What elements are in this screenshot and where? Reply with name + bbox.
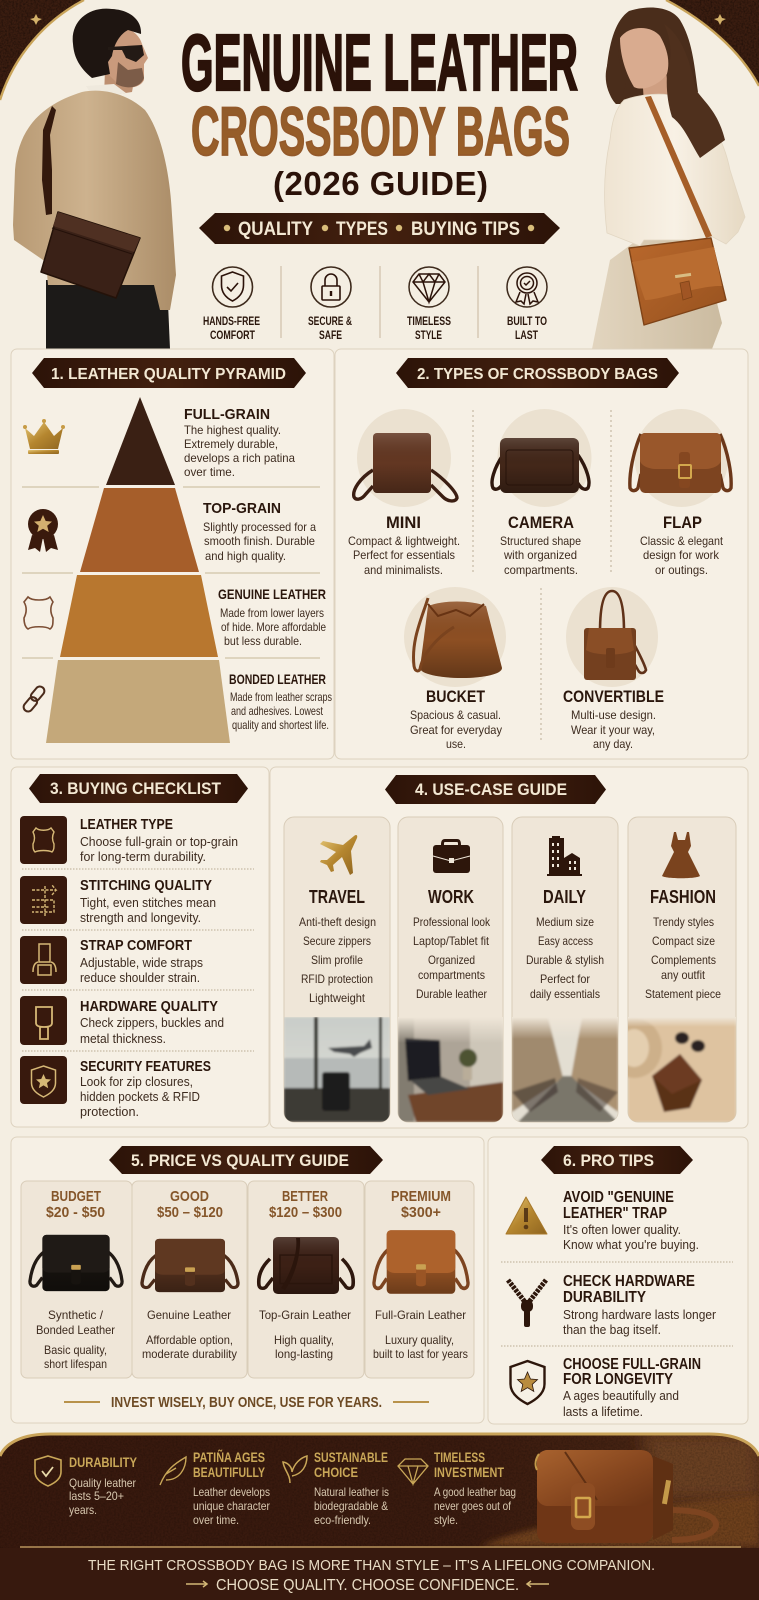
heading: section 5: 5. PRICE VS QUALITY GUIDE: [131, 1151, 349, 1170]
panel: price vs quality guide: [11, 1137, 484, 1423]
use case: daily: daily essentials: [530, 987, 600, 1001]
bag type: convertible: CONVERTIBLE: [563, 687, 664, 706]
check item: hardware: Check zippers, buckles and: [80, 1015, 224, 1030]
use case: travel: Secure zippers: [303, 934, 371, 948]
photo: laptop desk: [398, 1017, 503, 1122]
bag type: convertible: [563, 587, 664, 751]
tip: hardware: Strong hardware lasts longer: [563, 1307, 717, 1322]
tier text: full-grain: The highest quality.: [184, 423, 281, 437]
bag type: flap: design for work: [643, 548, 720, 562]
panel: pro tips: [488, 1137, 748, 1424]
tier text: top-grain: [203, 500, 316, 563]
benefit: sustainable: SUSTAINABLE: [314, 1449, 388, 1465]
benefit: timeless: [398, 1449, 516, 1527]
check item: leather type: Choose full-grain or top-grain: [80, 834, 238, 849]
benefit: patina: Leather develops: [193, 1485, 270, 1499]
bag type: mini: and minimalists.: [364, 563, 443, 577]
figure: woman with tan bag: [592, 8, 745, 349]
price tier: premium: Luxury quality,: [385, 1333, 454, 1347]
price tier: better: long-lasting: [275, 1347, 333, 1361]
heading: section 4: [385, 775, 606, 804]
price tier: premium: PREMIUM: [391, 1188, 451, 1205]
tier text: bonded leather: and adhesives. Lowest: [231, 704, 323, 718]
bag type: bucket: use.: [446, 737, 466, 751]
check item: hardware: metal thickness.: [80, 1031, 166, 1046]
tier text: full-grain: over time.: [184, 465, 235, 479]
price tier: budget: Bonded Leather: [36, 1323, 115, 1337]
panel: types of crossbody bags: [335, 349, 748, 759]
icon labels: COMFORT: [210, 328, 255, 342]
bag type: bucket: BUCKET: [426, 687, 486, 706]
tip: hardware: than the bag itself.: [563, 1322, 661, 1337]
benefit: durability: years.: [69, 1503, 97, 1517]
check item: security: hidden pockets & RFID: [80, 1089, 200, 1104]
icon: dress: [662, 832, 700, 878]
icon labels: SAFE: [319, 328, 342, 342]
price tier: budget: [21, 1181, 132, 1378]
use case: daily: Medium size: [536, 915, 594, 929]
use case: daily: [512, 817, 618, 1122]
bag type: camera: CAMERA: [508, 513, 574, 532]
benefit: sustainable: CHOICE: [314, 1464, 358, 1480]
heading: section 4: 4. USE-CASE GUIDE: [415, 781, 567, 799]
heading: section 5: [109, 1146, 383, 1174]
tip: choose full-grain: [510, 1356, 701, 1419]
heading: section 3: [29, 774, 248, 803]
use case: travel: Lightweight: [309, 991, 366, 1005]
use case: work: Professional look: [413, 915, 491, 929]
benefit: patina: unique character: [193, 1499, 270, 1513]
bag type: convertible: Wear it your way,: [571, 723, 655, 737]
tier text: bonded leather: [229, 671, 332, 732]
heading: section 1: [32, 358, 306, 388]
tip: hardware: DURABILITY: [563, 1289, 647, 1306]
tier text: full-grain: [184, 406, 295, 479]
pyramid tier: full-grain: [106, 397, 175, 485]
benefit: patina: [160, 1448, 270, 1527]
check item: security: SECURITY FEATURES: [80, 1059, 211, 1075]
check item: hardware: [20, 996, 224, 1046]
tip: hardware: [508, 1273, 717, 1337]
icon labels: LAST: [515, 328, 538, 342]
icon: secure padlock: [311, 267, 351, 307]
benefit: durability: DURABILITY: [69, 1454, 138, 1470]
heading: section 6: [541, 1146, 693, 1174]
heading: section 2: [396, 358, 679, 388]
use case: daily: Easy access: [538, 934, 593, 948]
check item: leather type: [20, 816, 238, 864]
use case: fashion: Complements: [651, 953, 716, 967]
footer band: [0, 1433, 759, 1600]
panel: leather quality pyramid: [11, 349, 334, 759]
use case: fashion: Statement piece: [645, 987, 721, 1001]
bag type: camera: compartments.: [504, 563, 578, 577]
tier text: top-grain: Slightly processed for a: [203, 520, 316, 534]
icon: leather hide: [24, 597, 53, 629]
price tier: better: Top-Grain Leather: [259, 1308, 351, 1322]
benefit: sustainable: biodegradable &: [314, 1499, 388, 1513]
bag type: camera: with organized: [503, 548, 577, 562]
bag type: camera: Structured shape: [500, 534, 581, 548]
benefit: durability: Quality leather: [69, 1476, 136, 1490]
tier text: genuine leather: of hide. More affordable: [221, 620, 326, 634]
price tier: budget: short lifespan: [44, 1357, 107, 1371]
use case: work: Laptop/Tablet fit: [413, 934, 490, 948]
tier text: bonded leather: quality and shortest life.: [232, 718, 329, 732]
icon labels: HANDS-FREE: [203, 314, 260, 328]
tier text: full-grain: develops a rich patina: [184, 451, 295, 465]
benefit: durability: [35, 1454, 138, 1517]
check item: strap comfort: Adjustable, wide straps: [80, 955, 203, 970]
price tier: good: $50 – $120: [157, 1204, 223, 1221]
tier text: bonded leather: Made from leather scraps: [230, 690, 332, 704]
bag type: convertible: Multi-use design.: [571, 708, 656, 722]
benefit icons row: [203, 266, 547, 342]
icon labels: SECURE &: [308, 314, 352, 328]
benefit: patina: PATIÑA AGES: [193, 1448, 265, 1465]
bag type: flap: or outings.: [655, 563, 708, 577]
photo: airport window: [284, 1017, 390, 1122]
check item: strap comfort: STRAP COMFORT: [80, 938, 192, 954]
tier text: genuine leather: but less durable.: [224, 634, 302, 648]
price tier: better: High quality,: [274, 1333, 334, 1347]
panel: use-case guide: [270, 767, 748, 1128]
icon labels: TIMELESS: [407, 314, 451, 328]
use case: work: Durable leather: [416, 987, 487, 1001]
check item: leather type: for long-term durability.: [80, 849, 206, 864]
bag type: bucket: Great for everyday: [410, 723, 502, 737]
use case: travel: [284, 817, 390, 1122]
tier text: full-grain: FULL-GRAIN: [184, 406, 270, 423]
pyramid tier: bonded leather: [46, 660, 230, 743]
icon: briefcase: [433, 839, 470, 873]
price tier: good: GOOD: [170, 1188, 209, 1205]
icon: chain: [22, 685, 46, 713]
check item: leather type: LEATHER TYPE: [80, 817, 173, 833]
bag type: flap: Classic & elegant: [640, 534, 724, 548]
title: [181, 18, 578, 202]
price tier: good: moderate durability: [142, 1347, 237, 1361]
bag type: mini: Compact & lightweight.: [348, 534, 460, 548]
check item: security: Look for zip closures,: [80, 1074, 193, 1089]
price tier: budget: Synthetic /: [48, 1308, 104, 1322]
bag type: convertible: any day.: [593, 737, 633, 751]
tier text: genuine leather: GENUINE LEATHER: [218, 586, 326, 602]
benefit: durability: lasts 5–20+: [69, 1489, 124, 1503]
tip: choose full-grain: FOR LONGEVITY: [563, 1371, 674, 1388]
benefit: sustainable: [283, 1449, 389, 1527]
heading: section 3: 3. BUYING CHECKLIST: [50, 780, 221, 798]
title: (2026 GUIDE): [273, 165, 488, 202]
pyramid tier: genuine leather: [60, 575, 218, 657]
subtitle ribbon: TYPES: [336, 219, 388, 240]
pyramid tier dividers: [22, 487, 320, 658]
benefit: timeless: INVESTMENT: [434, 1464, 504, 1480]
heading: section 2: 2. TYPES OF CROSSBODY BAGS: [417, 366, 658, 383]
tip: avoid trap: AVOID "GENUINE: [563, 1189, 674, 1206]
panel: buying checklist: [11, 767, 269, 1127]
check item: security: protection.: [80, 1104, 139, 1119]
tip: avoid trap: Know what you're buying.: [563, 1237, 699, 1252]
benefit: sustainable: eco-friendly.: [314, 1513, 371, 1527]
check item: strap comfort: reduce shoulder strain.: [80, 970, 200, 985]
bag type: bucket: [404, 587, 506, 751]
icon: built to last rosette: [507, 267, 547, 307]
tip: choose full-grain: CHOOSE FULL-GRAIN: [563, 1356, 701, 1373]
price tier: better: $120 – $300: [269, 1204, 342, 1221]
subtitle ribbon: QUALITY: [238, 219, 313, 240]
tier text: top-grain: smooth finish. Durable: [204, 534, 315, 548]
icon: hands-free shield: [212, 267, 252, 307]
price tier: better: BETTER: [282, 1188, 328, 1205]
tier text: full-grain: Extremely durable,: [184, 437, 278, 451]
use case: travel: Anti-theft design: [299, 915, 376, 929]
icon: crown: [23, 419, 65, 454]
use case: daily: Durable & stylish: [526, 953, 604, 967]
price tier: premium: $300+: [401, 1204, 441, 1221]
tip: avoid trap: LEATHER" TRAP: [563, 1205, 667, 1222]
check item: stitching: strength and longevity.: [80, 910, 201, 925]
bag type: mini: [348, 409, 460, 577]
icon: city buildings: [547, 836, 582, 876]
use case: daily: DAILY: [543, 887, 586, 907]
closing message: THE RIGHT CROSSBODY BAG IS MORE THAN STYLE – IT'S A LIFELONG COMPANION.: [88, 1557, 655, 1574]
tier text: bonded leather: BONDED LEATHER: [229, 671, 326, 687]
tip: avoid trap: [506, 1189, 699, 1252]
tip: avoid trap: It's often lower quality.: [563, 1222, 681, 1237]
benefit: timeless: style.: [434, 1513, 458, 1527]
footer bag: [536, 1450, 716, 1543]
bag type: flap: FLAP: [663, 513, 702, 532]
tip: hardware: CHECK HARDWARE: [563, 1273, 695, 1290]
tip: choose full-grain: A ages beautifully and: [563, 1388, 679, 1403]
use case: daily: Perfect for: [540, 972, 590, 986]
price tier: budget: Basic quality,: [44, 1343, 107, 1357]
price tier: premium: built to last for years: [373, 1347, 468, 1361]
check item: stitching: Tight, even stitches mean: [80, 895, 216, 910]
use case: work: [398, 817, 503, 1122]
check item: strap comfort: [20, 936, 203, 985]
closing message: [88, 1557, 655, 1594]
benefit: patina: BEAUTIFULLY: [193, 1464, 265, 1480]
icon: airplane: [320, 835, 357, 875]
check item: hardware: HARDWARE QUALITY: [80, 999, 218, 1015]
price tier: good: Genuine Leather: [147, 1308, 231, 1322]
use case: travel: Slim profile: [311, 953, 363, 967]
price tier: budget: BUDGET: [51, 1188, 101, 1205]
tier text: genuine leather: Made from lower layers: [220, 606, 324, 620]
benefit: timeless: A good leather bag: [434, 1485, 516, 1499]
use case: fashion: any outfit: [661, 968, 706, 982]
icon labels: [203, 314, 547, 342]
figure: man with dark bag: [13, 9, 176, 349]
price tier: premium: [365, 1181, 474, 1378]
photo: flat lay: [628, 1017, 736, 1122]
use case: travel: TRAVEL: [309, 887, 365, 907]
tier text: top-grain: and high quality.: [205, 549, 286, 563]
pyramid tier: top-grain: [80, 488, 199, 572]
check item: stitching: STITCHING QUALITY: [80, 878, 212, 894]
benefit: patina: over time.: [193, 1513, 239, 1527]
tagline: INVEST WISELY, BUY ONCE, USE FOR YEARS.: [111, 1394, 382, 1411]
benefit: timeless: never goes out of: [434, 1499, 512, 1513]
price tier: good: [132, 1181, 247, 1378]
icon: rosette: [28, 509, 58, 552]
closing message: CHOOSE QUALITY. CHOOSE CONFIDENCE.: [216, 1577, 519, 1594]
use case: travel: RFID protection: [301, 972, 373, 986]
bag type: mini: Perfect for essentials: [353, 548, 455, 562]
subtitle ribbon: [199, 213, 560, 244]
benefit: timeless: TIMELESS: [434, 1449, 485, 1465]
use case: fashion: Compact size: [652, 934, 715, 948]
tier text: genuine leather: [218, 586, 326, 648]
use case: fashion: [628, 816, 736, 1122]
use case: work: WORK: [428, 887, 474, 907]
bag type: mini: MINI: [386, 513, 421, 532]
check item: security: [20, 1056, 211, 1119]
bag type: camera: [492, 409, 592, 577]
price tier: good: Affordable option,: [146, 1333, 233, 1347]
price tier: premium: Full-Grain Leather: [375, 1308, 466, 1322]
use case: fashion: Trendy styles: [653, 915, 714, 929]
icon: timeless diamond: [409, 267, 449, 307]
heading: section 6: 6. PRO TIPS: [563, 1151, 654, 1170]
tier text: top-grain: TOP-GRAIN: [203, 500, 281, 517]
price tier: better: [248, 1181, 364, 1378]
heading: section 1: 1. LEATHER QUALITY PYRAMID: [51, 366, 286, 383]
bag type: flap: [630, 409, 731, 577]
icon labels: STYLE: [415, 328, 442, 342]
tip: choose full-grain: lasts a lifetime.: [563, 1404, 643, 1419]
price tier: budget: $20 - $50: [46, 1204, 105, 1221]
use case: work: Organized: [428, 953, 475, 967]
use case: work: compartments: [418, 968, 485, 982]
benefit: sustainable: Natural leather is: [314, 1485, 389, 1499]
bag type: bucket: Spacious & casual.: [410, 708, 501, 722]
photo: city street: [512, 1017, 618, 1122]
leather corners: [0, 0, 759, 112]
subtitle ribbon: BUYING TIPS: [411, 219, 520, 240]
check item: stitching: [20, 876, 216, 925]
use case: fashion: FASHION: [650, 887, 716, 907]
icon labels: BUILT TO: [507, 314, 547, 328]
